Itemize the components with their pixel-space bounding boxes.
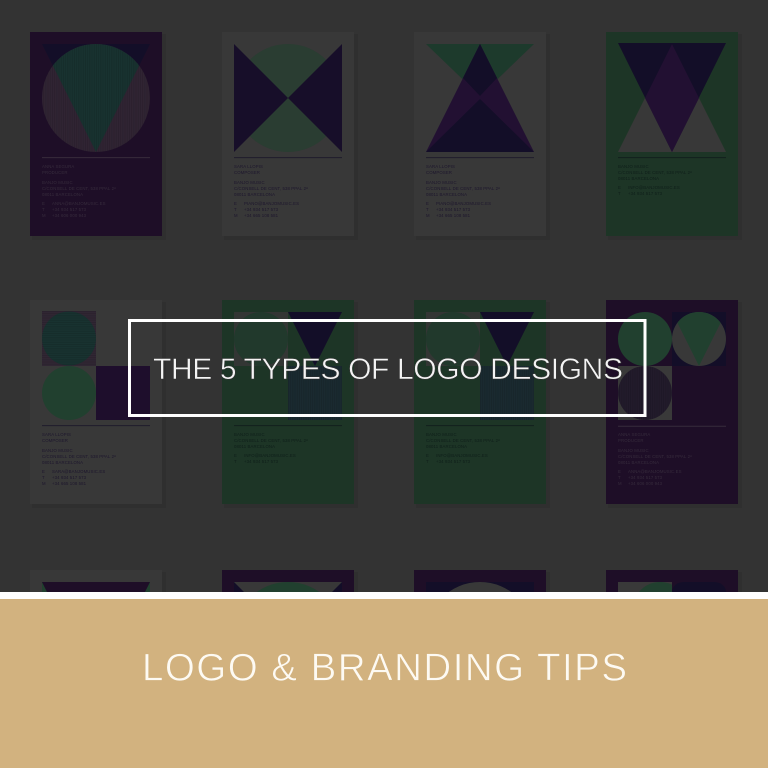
contact text: C/CONSELL DE CENT, 538 PPAL 2ª xyxy=(618,170,692,175)
contact text: +34 934 517 573 xyxy=(52,475,87,480)
contact text: COMPOSER xyxy=(234,170,260,175)
contact text: T xyxy=(618,191,621,196)
contact text: +34 934 517 573 xyxy=(244,459,279,464)
contact text xyxy=(42,432,116,486)
contact text: E xyxy=(42,469,45,474)
contact text: M xyxy=(426,213,430,218)
contact text: BANJO MUSIC xyxy=(426,432,457,437)
contact text: BANJO MUSIC xyxy=(42,448,73,453)
card: grey bow-tie xyxy=(222,32,354,236)
card: green shapes B xyxy=(414,300,546,504)
contact text xyxy=(234,164,308,218)
card: partial purple circle xyxy=(414,570,546,690)
contact text: +34 934 517 573 xyxy=(244,207,279,212)
contact text: INFO@BANJOMUSIC.ES xyxy=(244,453,296,458)
title text: THE 5 TYPES OF LOGO DESIGNS xyxy=(153,353,623,386)
contact text: ANNA SEGURA xyxy=(42,164,74,169)
contact text xyxy=(234,432,308,464)
contact text: C/CONSELL DE CENT, 538 PPAL 2ª xyxy=(618,454,692,459)
contact text: INFO@BANJOMUSIC.ES xyxy=(628,185,680,190)
contact text: BANJO MUSIC xyxy=(42,180,73,185)
contact text: C/CONSELL DE CENT, 538 PPAL 2ª xyxy=(234,438,308,443)
tan footer panel xyxy=(0,599,768,768)
contact text: T xyxy=(426,459,429,464)
contact text: SARA LLOPIS xyxy=(234,164,263,169)
contact text: BANJO MUSIC xyxy=(618,164,649,169)
contact text: +34 665 108 581 xyxy=(436,213,471,218)
contact text: PIANO@BANJOMUSIC.ES xyxy=(436,201,491,206)
contact text: PRODUCER xyxy=(42,170,68,175)
contact text: +34 934 517 573 xyxy=(436,459,471,464)
contact text: COMPOSER xyxy=(426,170,452,175)
contact text: +34 665 108 581 xyxy=(52,481,87,486)
contact text: 08011 BARCELONA xyxy=(234,444,275,449)
contact text xyxy=(618,164,692,196)
contact text: BANJO MUSIC xyxy=(234,432,265,437)
contact text: E xyxy=(42,201,45,206)
contact text: BANJO MUSIC xyxy=(618,448,649,453)
white divider band xyxy=(0,592,768,599)
contact text xyxy=(426,164,500,218)
contact text: ANNA@BANJOMUSIC.ES xyxy=(52,201,106,206)
contact text xyxy=(426,432,500,464)
card: purple circle and triangle xyxy=(30,32,162,236)
contact text: M xyxy=(618,481,622,486)
contact text: INFO@BANJOMUSIC.ES xyxy=(436,453,488,458)
card: grey triangles xyxy=(414,32,546,236)
footer heading: LOGO & BRANDING TIPS xyxy=(142,646,627,690)
contact text: 08011 BARCELONA xyxy=(618,460,659,465)
contact text: E xyxy=(234,453,237,458)
card: partial purple hourglass xyxy=(222,570,354,690)
card shadows xyxy=(32,34,742,602)
contact text: +34 606 000 943 xyxy=(628,481,663,486)
contact text: C/CONSELL DE CENT, 538 PPAL 2ª xyxy=(426,186,500,191)
title box xyxy=(130,320,645,416)
contact text: 08011 BARCELONA xyxy=(234,192,275,197)
contact text: T xyxy=(234,207,237,212)
contact text: +34 934 517 573 xyxy=(628,475,663,480)
contact text: T xyxy=(618,475,621,480)
contact text: E xyxy=(234,201,237,206)
card: partial grey xyxy=(30,570,162,690)
contact text: COMPOSER xyxy=(42,438,68,443)
card: partial purple square xyxy=(606,570,738,592)
contact text xyxy=(42,164,116,218)
contact text: +34 934 517 573 xyxy=(52,207,87,212)
contact text xyxy=(618,432,692,486)
contact text: 08011 BARCELONA xyxy=(42,192,83,197)
contact text: 08011 BARCELONA xyxy=(618,176,659,181)
card: green triangles xyxy=(606,32,738,236)
contact text: +34 934 517 573 xyxy=(628,191,663,196)
contact text: SARA LLOPIS xyxy=(426,164,455,169)
contact text: +34 665 108 581 xyxy=(244,213,279,218)
contact text: T xyxy=(42,475,45,480)
card: purple shapes xyxy=(606,300,738,504)
contact text: E xyxy=(618,469,621,474)
contact text: M xyxy=(42,213,46,218)
contact text: ANNA@BANJOMUSIC.ES xyxy=(628,469,682,474)
contact text: +34 934 517 573 xyxy=(436,207,471,212)
contact text: M xyxy=(42,481,46,486)
contact text: T xyxy=(42,207,45,212)
contact text: T xyxy=(426,207,429,212)
contact text: E xyxy=(426,201,429,206)
contact text: BANJO MUSIC xyxy=(234,180,265,185)
contact text: PRODUCER xyxy=(618,438,644,443)
contact text: 08011 BARCELONA xyxy=(426,444,467,449)
contact text: E xyxy=(618,185,621,190)
contact text: SARA LLOPIS xyxy=(42,432,71,437)
contact text: C/CONSELL DE CENT, 538 PPAL 2ª xyxy=(42,186,116,191)
contact text: 08011 BARCELONA xyxy=(426,192,467,197)
contact text: PIANO@BANJOMUSIC.ES xyxy=(244,201,299,206)
contact text: 08011 BARCELONA xyxy=(42,460,83,465)
contact text: SARA@BANJOMUSIC.ES xyxy=(52,469,105,474)
contact text: C/CONSELL DE CENT, 538 PPAL 2ª xyxy=(426,438,500,443)
contact text: C/CONSELL DE CENT, 538 PPAL 2ª xyxy=(42,454,116,459)
contact text: M xyxy=(234,213,238,218)
contact text: T xyxy=(234,459,237,464)
contact text: +34 606 000 943 xyxy=(52,213,87,218)
contact text: ANNA SEGURA xyxy=(618,432,650,437)
contact text: BANJO MUSIC xyxy=(426,180,457,185)
card: green shapes A xyxy=(222,300,354,504)
contact text: E xyxy=(426,453,429,458)
business card grid xyxy=(30,32,738,592)
card: grey squares and circles xyxy=(30,300,162,504)
contact text: C/CONSELL DE CENT, 538 PPAL 2ª xyxy=(234,186,308,191)
